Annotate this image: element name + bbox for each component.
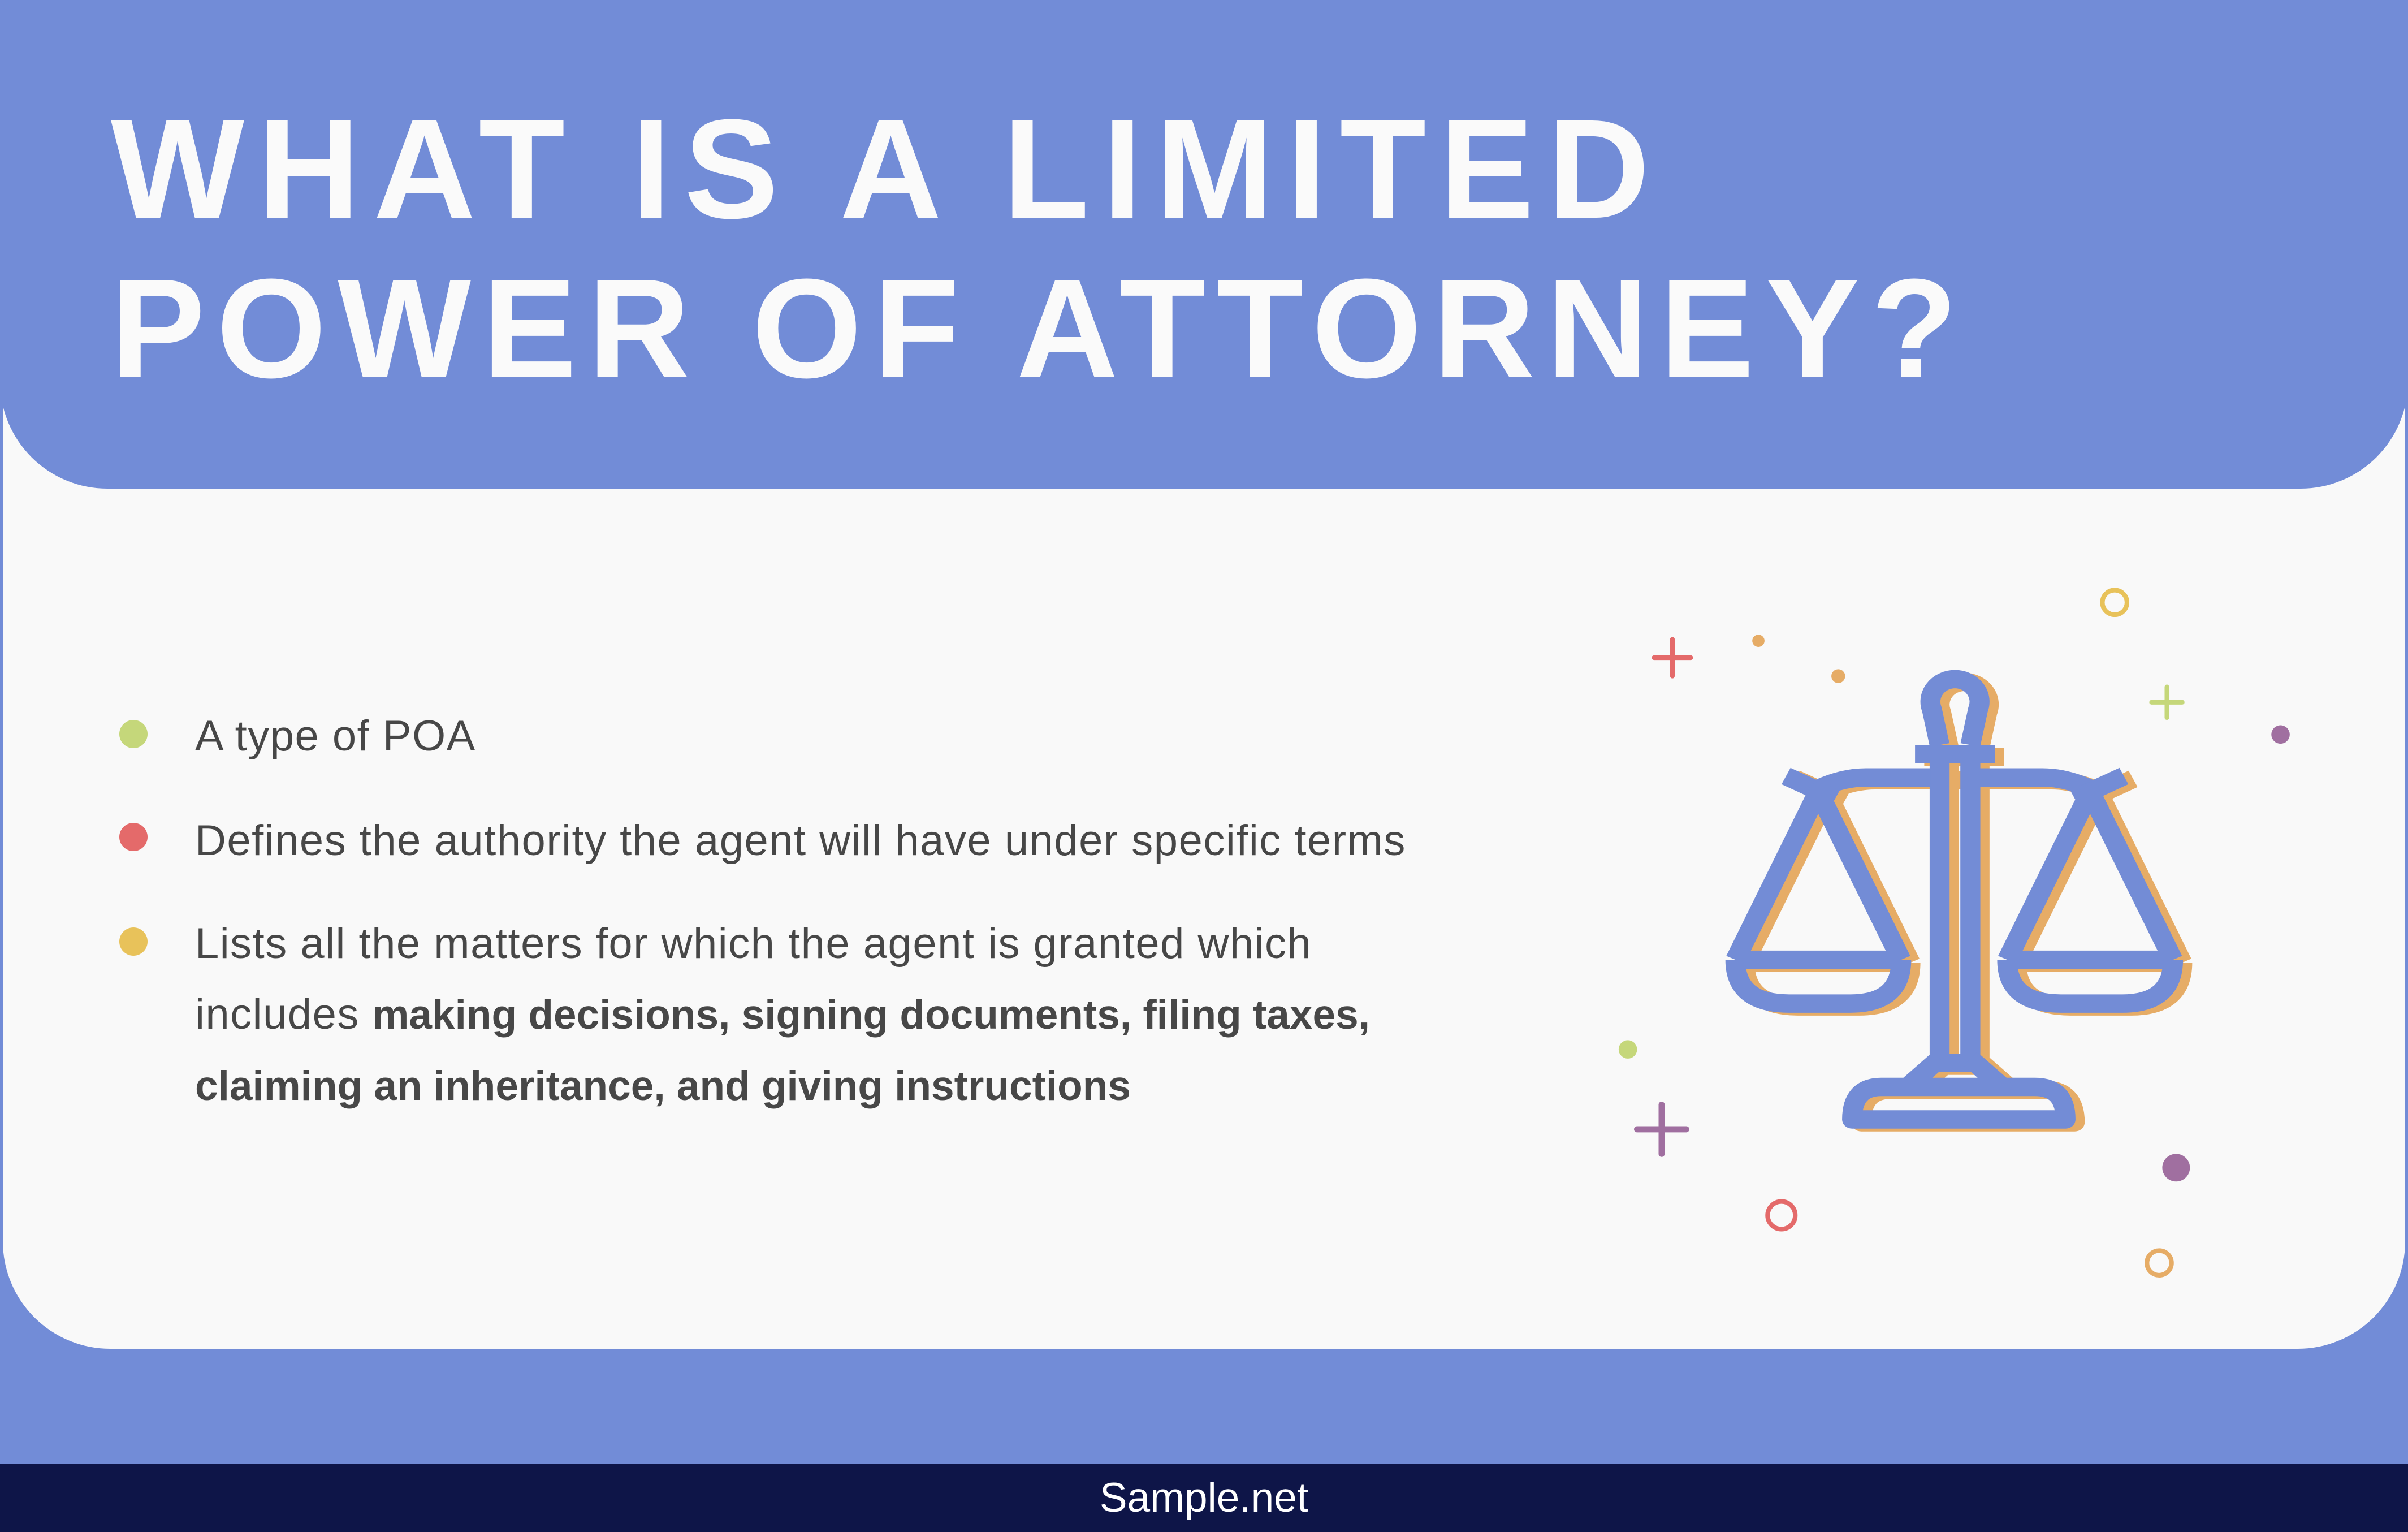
title: WHAT IS A LIMITED: [111, 90, 1663, 248]
title: [111, 90, 1969, 407]
title: POWER OF ATTORNEY?: [111, 249, 1969, 407]
bullet list: claiming an inheritance, and giving instructions: [195, 1063, 1131, 1109]
icon: scales: [1735, 679, 2182, 1122]
decorations: sparkles: [1619, 590, 2290, 1275]
bullet 3: [119, 920, 1370, 1109]
bullet 1: [119, 712, 476, 760]
bullet list: A type of POA: [195, 712, 476, 760]
footer: Sample.net: [1100, 1475, 1308, 1521]
bullet list: Lists all the matters for which the agent is granted which: [195, 920, 1312, 968]
bullet list: Defines the authority the agent will have under specific terms: [195, 817, 1406, 865]
bullet 2: [119, 817, 1406, 865]
header band: [0, 0, 2408, 489]
bullet list: includes making decisions, signing documents, filing taxes,: [195, 990, 1370, 1038]
footer: [0, 1464, 2408, 1532]
bullet list: [119, 712, 1406, 1109]
